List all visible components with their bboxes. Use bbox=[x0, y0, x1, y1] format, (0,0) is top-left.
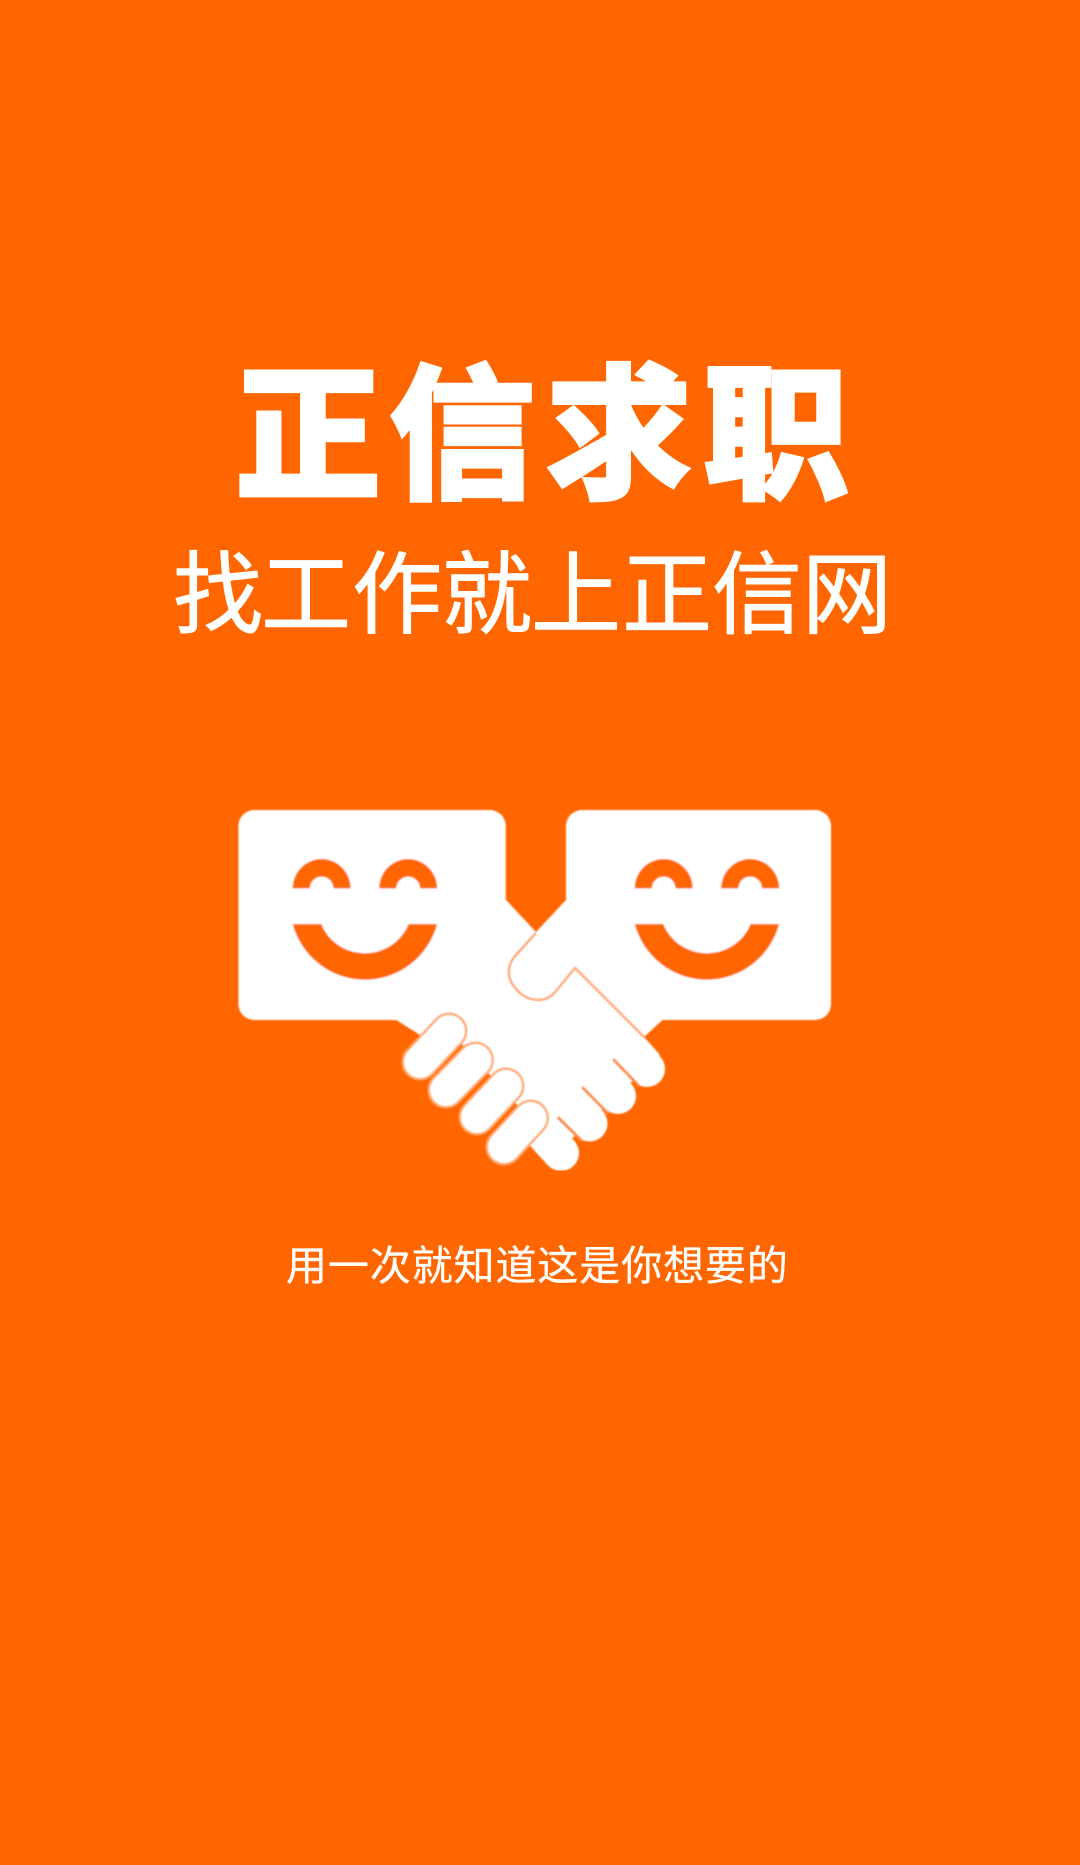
handshake bbox=[396, 895, 663, 1153]
title: 正信求职 bbox=[235, 355, 849, 518]
left face bbox=[293, 859, 437, 980]
icon: two smiling speech bubbles shaking hands bbox=[238, 810, 831, 1153]
subtitle: 找工作就上正信网 bbox=[173, 546, 892, 646]
right speech bubble bbox=[566, 810, 831, 1020]
left speech bubble bbox=[238, 810, 506, 1020]
tagline: 用一次就知道这是你想要的 bbox=[286, 1243, 789, 1289]
right face bbox=[635, 859, 779, 980]
